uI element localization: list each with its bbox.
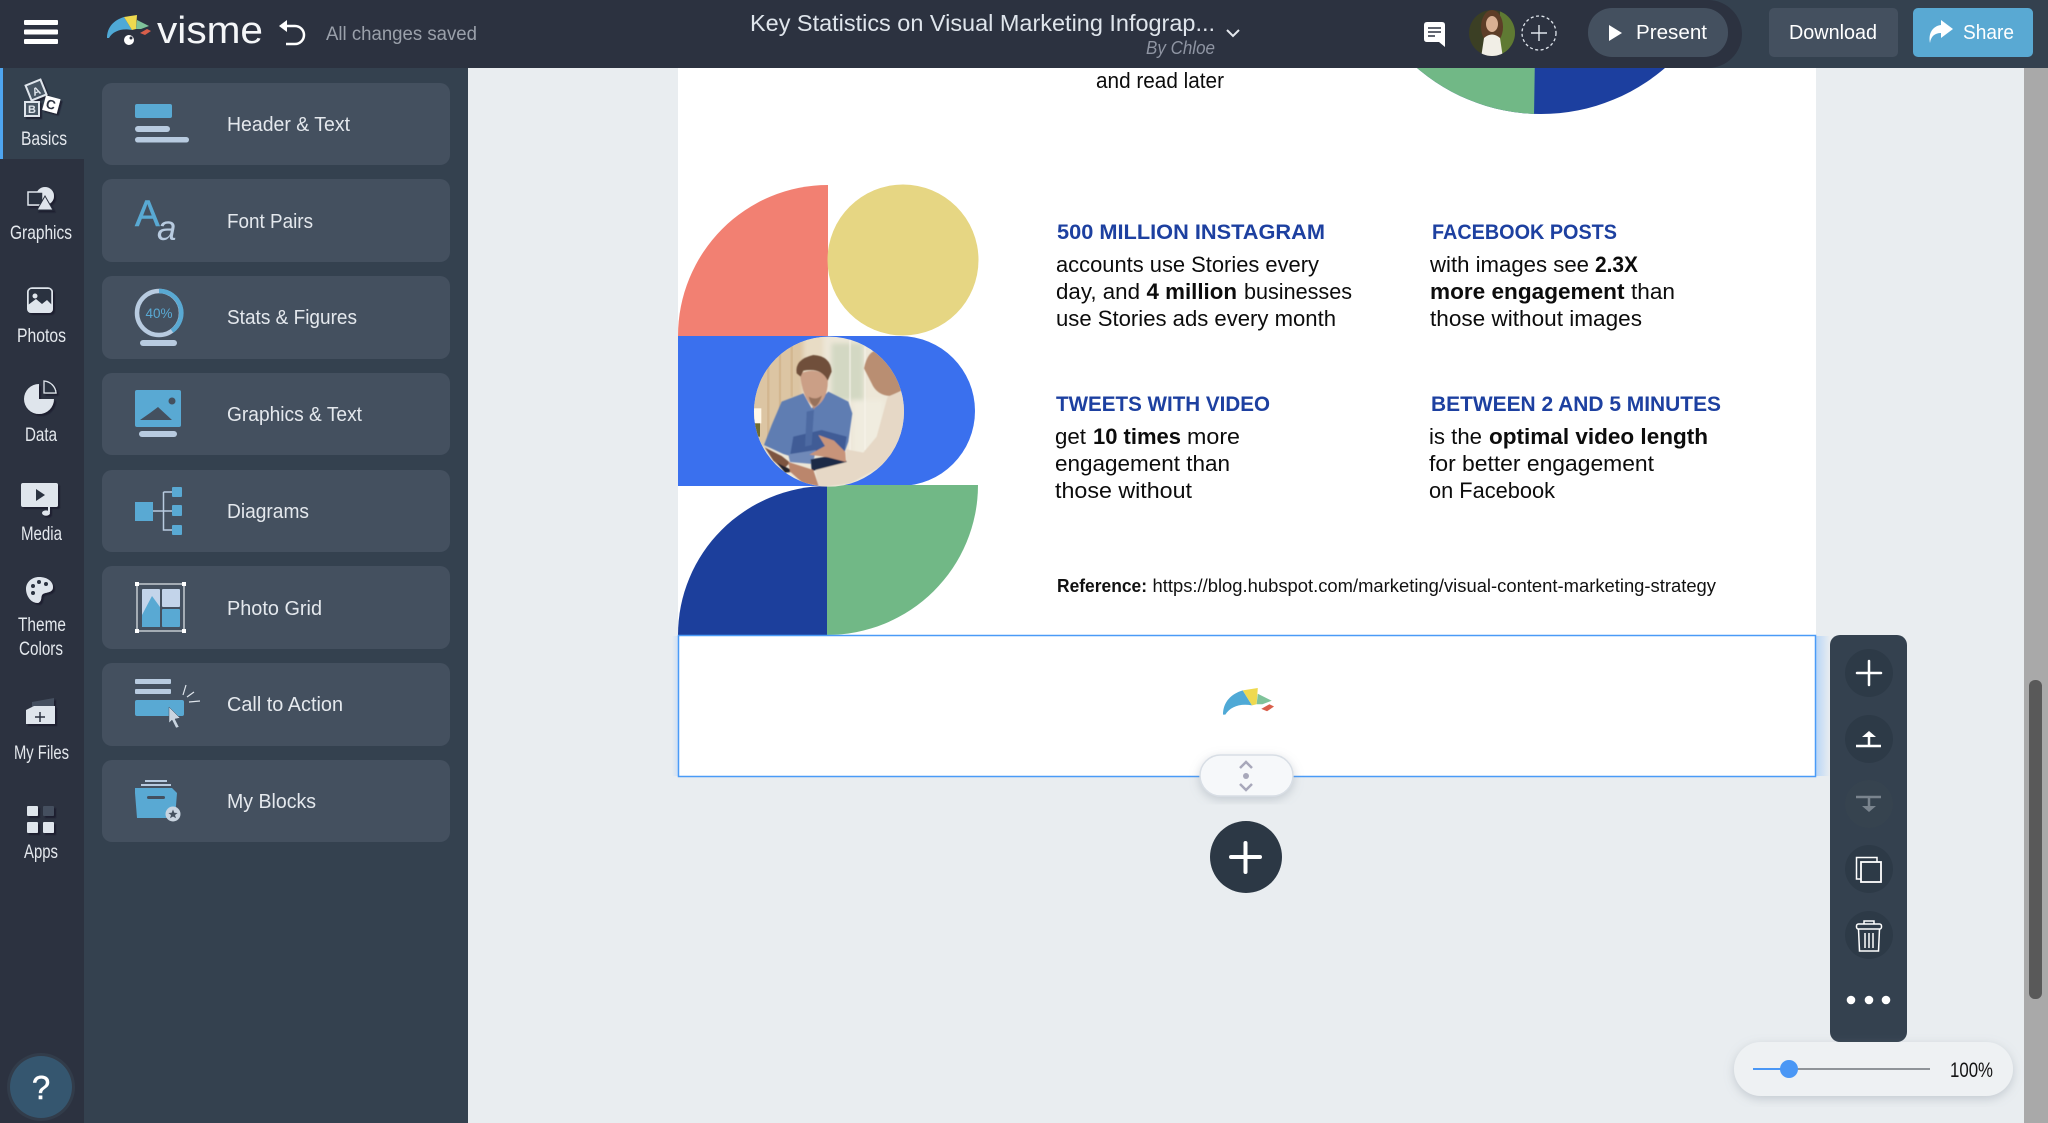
rail item: Photos: Photos — [17, 325, 66, 347]
icon: comments — [1424, 22, 1445, 47]
icon: move down disabled — [1845, 780, 1893, 828]
rail item: Basics: Basics — [21, 128, 67, 150]
stat: Facebook posts: FACEBOOK POSTS — [1432, 220, 1617, 244]
stat: Video length: is the — [1429, 424, 1482, 449]
stat: Facebook posts: 2.3X — [1595, 252, 1638, 277]
card: Photo Grid — [102, 566, 450, 649]
rail item: Media — [21, 483, 62, 545]
card: Font Pairs: Font Pairs — [227, 210, 313, 233]
stat: Video length: on Facebook — [1429, 478, 1556, 503]
card: Font Pairs: A — [135, 193, 160, 234]
logo: visme — [107, 10, 263, 52]
help button — [7, 1053, 75, 1121]
selected footer block — [672, 636, 1830, 776]
present button — [1588, 8, 1728, 57]
stat: Tweets with video: those without — [1055, 478, 1192, 503]
resize handle — [1200, 755, 1293, 796]
geometric shape: yellow circle — [828, 184, 978, 336]
card: Font Pairs — [102, 179, 450, 262]
stat: Instagram: day, and — [1056, 279, 1140, 304]
elements panel — [84, 68, 468, 1123]
card: Diagrams: Diagrams — [227, 500, 309, 523]
footer logo — [1223, 688, 1274, 715]
rail item: My Files: My Files — [14, 742, 69, 764]
reference line: https://blog.hubspot.com/marketing/visual-content-marketing-strategy — [1152, 576, 1716, 596]
share button: Share — [1963, 21, 2014, 44]
stat: Facebook posts: than — [1631, 279, 1675, 304]
rail item: Data: Data — [25, 424, 57, 446]
icon: menu — [24, 20, 58, 44]
stat: Video length — [1429, 392, 1721, 503]
pie chart fragment — [1417, 68, 1665, 114]
card: Font Pairs: a — [157, 209, 176, 248]
card: Stats & Figures: Stats & Figures — [227, 306, 357, 329]
stat: Instagram: 4 million — [1146, 279, 1237, 304]
hands and tablet — [809, 435, 846, 462]
stat: Facebook posts: those without images — [1430, 306, 1642, 331]
present button: Present — [1636, 21, 1707, 44]
stat: Instagram — [1056, 220, 1352, 331]
download button: Download — [1789, 21, 1877, 44]
geometric shape: blue rounded block — [678, 336, 975, 486]
stat: Tweets with video: TWEETS WITH VIDEO — [1056, 392, 1270, 416]
man left sleeve and jeans — [788, 450, 816, 464]
icon: move up — [1845, 715, 1893, 763]
card: Photo Grid: Photo Grid — [227, 597, 322, 620]
right block toolbar — [1830, 635, 1907, 1042]
card: Graphics & Text: Graphics & Text — [227, 403, 362, 426]
author: By Chloe — [1146, 38, 1215, 58]
rail item: Theme Colors: Theme — [18, 614, 66, 636]
card: Stats & Figures — [102, 276, 450, 359]
icon: add — [1845, 649, 1893, 697]
card: Call to Action — [102, 663, 450, 746]
stat: Tweets with video — [1055, 392, 1270, 503]
icon: delete — [1845, 911, 1893, 959]
man right — [864, 350, 902, 396]
add block button — [1210, 821, 1282, 893]
icon: undo — [279, 20, 304, 44]
card: Header & Text — [102, 83, 450, 165]
stat: Facebook posts: more engagement — [1430, 279, 1625, 304]
stat: Instagram: accounts use Stories every — [1056, 252, 1319, 277]
card: My Blocks — [102, 760, 450, 842]
avatar — [1469, 10, 1516, 58]
zoom control — [1734, 1042, 2013, 1096]
stat: Facebook posts: with images see — [1429, 252, 1589, 277]
rail item: Basics — [21, 80, 67, 150]
stat: Tweets with video: 10 times — [1093, 424, 1181, 449]
card: Call to Action: Call to Action — [227, 693, 343, 716]
rail item: Graphics — [10, 187, 72, 244]
document title: Key Statistics on Visual Marketing Infograp... — [750, 10, 1215, 36]
icon: more — [1847, 996, 1890, 1004]
rail item: Theme Colors: Colors — [19, 638, 63, 660]
geometric shape: navy quarter circle — [678, 486, 827, 635]
share button — [1913, 8, 2033, 57]
partial text: and read later: and read later — [1096, 68, 1224, 93]
top bar — [0, 0, 2048, 68]
stat: Tweets with video: more — [1187, 424, 1240, 449]
man left shirt — [764, 392, 852, 456]
rail item: Basics: B — [28, 104, 36, 116]
circular photo: two men looking at a tablet — [750, 333, 910, 490]
scrollbar — [2024, 68, 2048, 1123]
stat: Tweets with video: get — [1055, 424, 1086, 449]
canvas background — [468, 68, 2024, 1123]
geometric shape: coral quarter circle — [678, 185, 828, 336]
card: Header & Text: Header & Text — [227, 113, 350, 136]
icon: add collaborator — [1522, 16, 1556, 50]
rail item: Basics: C — [44, 96, 58, 113]
save status: All changes saved — [326, 24, 477, 45]
rail item: Data — [24, 381, 57, 446]
stat: Video length: BETWEEN 2 AND 5 MINUTES — [1431, 392, 1721, 416]
stat: Tweets with video: engagement than — [1055, 451, 1230, 476]
rail item: Apps — [24, 806, 58, 863]
rail item: Basics: A — [31, 85, 43, 99]
rail item: Theme Colors — [18, 577, 66, 660]
card: Diagrams — [102, 470, 450, 552]
rail item: Apps: Apps — [24, 841, 58, 863]
icon: duplicate — [1845, 845, 1893, 893]
card: My Blocks: My Blocks — [227, 790, 316, 813]
rail item: Graphics: Graphics — [10, 222, 72, 244]
logo: visme: visme — [157, 10, 263, 52]
stat: Facebook posts — [1429, 220, 1675, 331]
help button: ? — [32, 1069, 50, 1106]
rail item: Photos — [17, 288, 66, 347]
icon: chevron — [1227, 30, 1239, 36]
stat: Video length: optimal video length — [1489, 424, 1708, 449]
stat: Instagram: 500 MILLION INSTAGRAM — [1057, 220, 1325, 244]
stat: Video length: for better engagement — [1429, 451, 1654, 476]
stat: Instagram: businesses — [1244, 279, 1352, 304]
zoom control: 100% — [1950, 1059, 1993, 1082]
stat: Instagram: use Stories ads every month — [1056, 306, 1336, 331]
man left neck and head — [812, 405, 816, 410]
infographic page — [678, 68, 1816, 635]
download button — [1769, 8, 1898, 57]
geometric shape: green quarter circle — [827, 485, 978, 635]
card: Graphics & Text — [102, 373, 450, 455]
card: Stats & Figures: 40% — [145, 306, 173, 321]
rail item: Media: Media — [21, 523, 62, 545]
left icon rail — [0, 68, 84, 1123]
reference line: Reference: — [1057, 576, 1147, 596]
rail item: My Files — [14, 698, 69, 764]
